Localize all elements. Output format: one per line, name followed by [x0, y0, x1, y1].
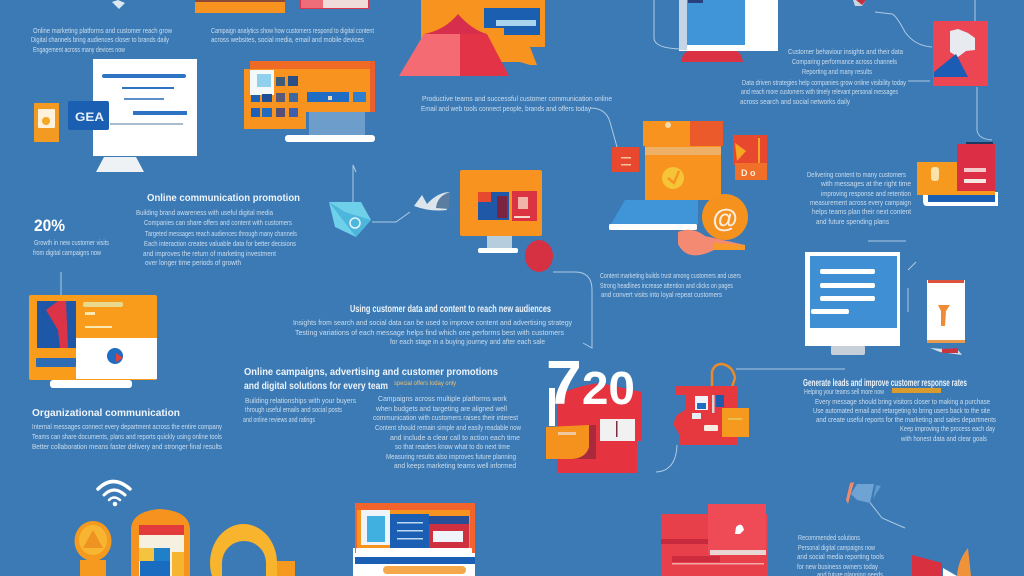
monitor: orange and white	[29, 295, 157, 388]
text block top middle: across websites, social media, email and mobile devices	[211, 35, 364, 44]
phone card with carrot	[927, 280, 965, 355]
laptop	[609, 200, 698, 230]
text block top left: Online marketing platforms and customer reach grow	[33, 26, 172, 35]
at-sign bubble	[678, 194, 748, 255]
text block bottom right	[797, 533, 884, 576]
text block right middle: measurement across every campaign	[810, 198, 911, 207]
monitor: blue top centre	[679, 0, 778, 62]
heading and text block left middle: Each interaction creates valuable data for better decisions	[144, 239, 296, 248]
heading and text lower left: Internal messages connect every department across the entire company	[32, 422, 222, 431]
text block top right: Comparing performance across channels	[792, 57, 897, 66]
top pink card	[300, 0, 369, 9]
at-sign bubble: @	[712, 203, 738, 233]
big heading and two text columns: Measuring results also improves future planning	[386, 452, 516, 461]
big heading and two text columns: through useful emails and social posts	[245, 405, 342, 414]
big heading and two text columns: Content should remain simple and easily readable now	[375, 423, 521, 432]
text block right middle: helps teams plan their next content	[812, 207, 912, 216]
monitor: blue right	[805, 252, 900, 355]
text block top right	[740, 47, 906, 106]
heading and text lower left	[32, 408, 222, 451]
orange bulb icon	[74, 521, 112, 576]
floating paper icon	[846, 482, 881, 504]
heading and text block left middle: over longer time periods of growth	[145, 258, 241, 267]
text block centre top	[421, 94, 612, 113]
text block top right: Reporting and many results	[802, 67, 872, 76]
teal envelope icon	[329, 202, 371, 237]
big heading and two text columns: communication with customers raises their interest	[373, 413, 519, 422]
text block bottom right: and social media reporting tools	[797, 552, 884, 561]
big heading and two text columns: Campaigns across multiple platforms work	[378, 394, 507, 403]
text block top middle	[211, 26, 375, 44]
text block bottom right: for new business owners today	[797, 562, 878, 571]
red calendar with number 720	[546, 349, 642, 473]
yellow ring icon	[210, 524, 295, 576]
big heading and two text columns: so that readers know what to do next time	[395, 442, 510, 451]
text block top right: Customer behaviour insights and their data	[788, 47, 904, 56]
monitor: orange grid	[244, 61, 375, 142]
heading and text lower left: Better collaboration means faster delivery and stronger final results	[32, 442, 222, 451]
orange card icon	[34, 103, 59, 142]
text block right middle: improving response and retention	[821, 189, 911, 198]
red card with figure	[933, 21, 988, 86]
heading and text lower left: Organizational communication	[32, 408, 180, 419]
text block right middle: with messages at the right time	[820, 179, 911, 188]
monitor: white dashboard	[93, 59, 197, 172]
text block centre right: and convert visits into loyal repeat customers	[601, 290, 722, 299]
text block centre top: Email and web tools connect people, brands and offers today	[421, 104, 591, 113]
heading and text centre: Testing variations of each message helps find which one performs best with customers	[295, 328, 564, 337]
big heading and two text columns: and online reviews and ratings	[243, 415, 315, 424]
red tag right: D o	[741, 168, 756, 178]
heading and text block left middle: Targeted messages reach audiences through many channels	[145, 229, 297, 238]
text block right lower: Helping your teams sell more now	[804, 387, 884, 396]
text block top left	[31, 26, 172, 54]
phone app icon	[131, 509, 190, 576]
text block top right: across search and social networks daily	[740, 97, 850, 106]
big heading and two text columns	[243, 367, 521, 470]
big heading and two text columns: and digital solutions for every team	[244, 381, 388, 392]
heading and text centre: Insights from search and social data can be used to improve content and advertising strategy	[293, 318, 572, 327]
heading and text centre: Using customer data and content to reach new audiences	[350, 304, 551, 315]
red circle	[525, 240, 553, 272]
heading and text centre	[293, 304, 572, 346]
heading and text block left middle: Building brand awareness with useful digital media	[136, 208, 274, 217]
top sparkle icon	[112, 0, 125, 9]
text block centre right: Content marketing builds trust among customers and users	[600, 271, 741, 280]
text block centre right	[600, 271, 741, 299]
text block bottom right: Personal digital campaigns now	[798, 543, 875, 552]
red small tag left	[612, 147, 639, 172]
text block right middle: Delivering content to many customers	[807, 170, 906, 179]
text block top left: Digital channels bring audiences closer to brands daily	[31, 35, 169, 44]
big heading and two text columns: when budgets and targeting are aligned well	[375, 404, 507, 413]
heading and text block left middle: Companies can share offers and content with customers	[144, 218, 292, 227]
text block right middle	[807, 170, 912, 226]
text block centre right: Strong headlines increase attention and clicks on pages	[600, 281, 733, 290]
big heading and two text columns: and include a clear call to action each time	[390, 433, 520, 442]
text block right lower: Keep improving the process each day	[900, 424, 995, 433]
text block top right: Data driven strategies help companies grow online visibility today	[742, 78, 906, 87]
red shopping bag	[673, 364, 749, 445]
text block top left: Engagement across many devices now	[33, 45, 125, 54]
text block top right: and reach more customers with timely relevant personal messages	[741, 87, 898, 96]
big heading and two text columns: and keeps marketing teams well informed	[394, 461, 516, 470]
bottom right flag and flame	[912, 548, 971, 576]
heading and text block left middle: and improves the return of marketing investment	[143, 249, 277, 258]
monitor: orange centre	[460, 170, 542, 253]
orange and red cards right	[917, 142, 998, 206]
red calendar with number 720: 720	[546, 349, 635, 418]
heading and text centre: for each stage in a buying journey and after each sale	[390, 337, 545, 346]
big heading and two text columns: Building relationships with your buyers	[245, 396, 356, 405]
text block right lower	[803, 378, 996, 443]
orange gift box	[643, 121, 723, 200]
heading and text lower left: Teams can share documents, plans and reports quickly using online tools	[32, 432, 222, 441]
tent illustration	[399, 0, 545, 76]
big heading and two text columns: special offers today only	[394, 381, 456, 387]
red document stack	[661, 504, 768, 576]
red tag right	[733, 135, 767, 180]
top orange bar	[195, 0, 285, 13]
heading and text block left middle: Online communication promotion	[147, 193, 300, 204]
blue badge	[68, 101, 109, 130]
text block right middle: and future spending plans	[816, 217, 889, 226]
blue badge: GEA	[75, 110, 104, 124]
small red marker top	[853, 0, 866, 6]
text block top middle: Campaign analytics show how customers respond to digital content	[211, 26, 375, 35]
wifi icon	[98, 482, 130, 506]
text block bottom right: Recommended solutions	[798, 533, 860, 542]
bird icon	[414, 192, 450, 210]
laptop with orange screen	[353, 503, 475, 576]
statistic 20%: 20%	[34, 216, 65, 235]
statistic 20%: Growth in new customer visits	[34, 238, 109, 247]
text block centre top: Productive teams and successful customer communication online	[422, 94, 612, 103]
heading and text block left middle	[136, 193, 300, 267]
statistic 20%	[33, 216, 109, 257]
text block right lower: with honest data and clear goals	[900, 434, 987, 443]
statistic 20%: from digital campaigns now	[33, 248, 101, 257]
big heading and two text columns: Online campaigns, advertising and customer promotions	[244, 367, 498, 378]
